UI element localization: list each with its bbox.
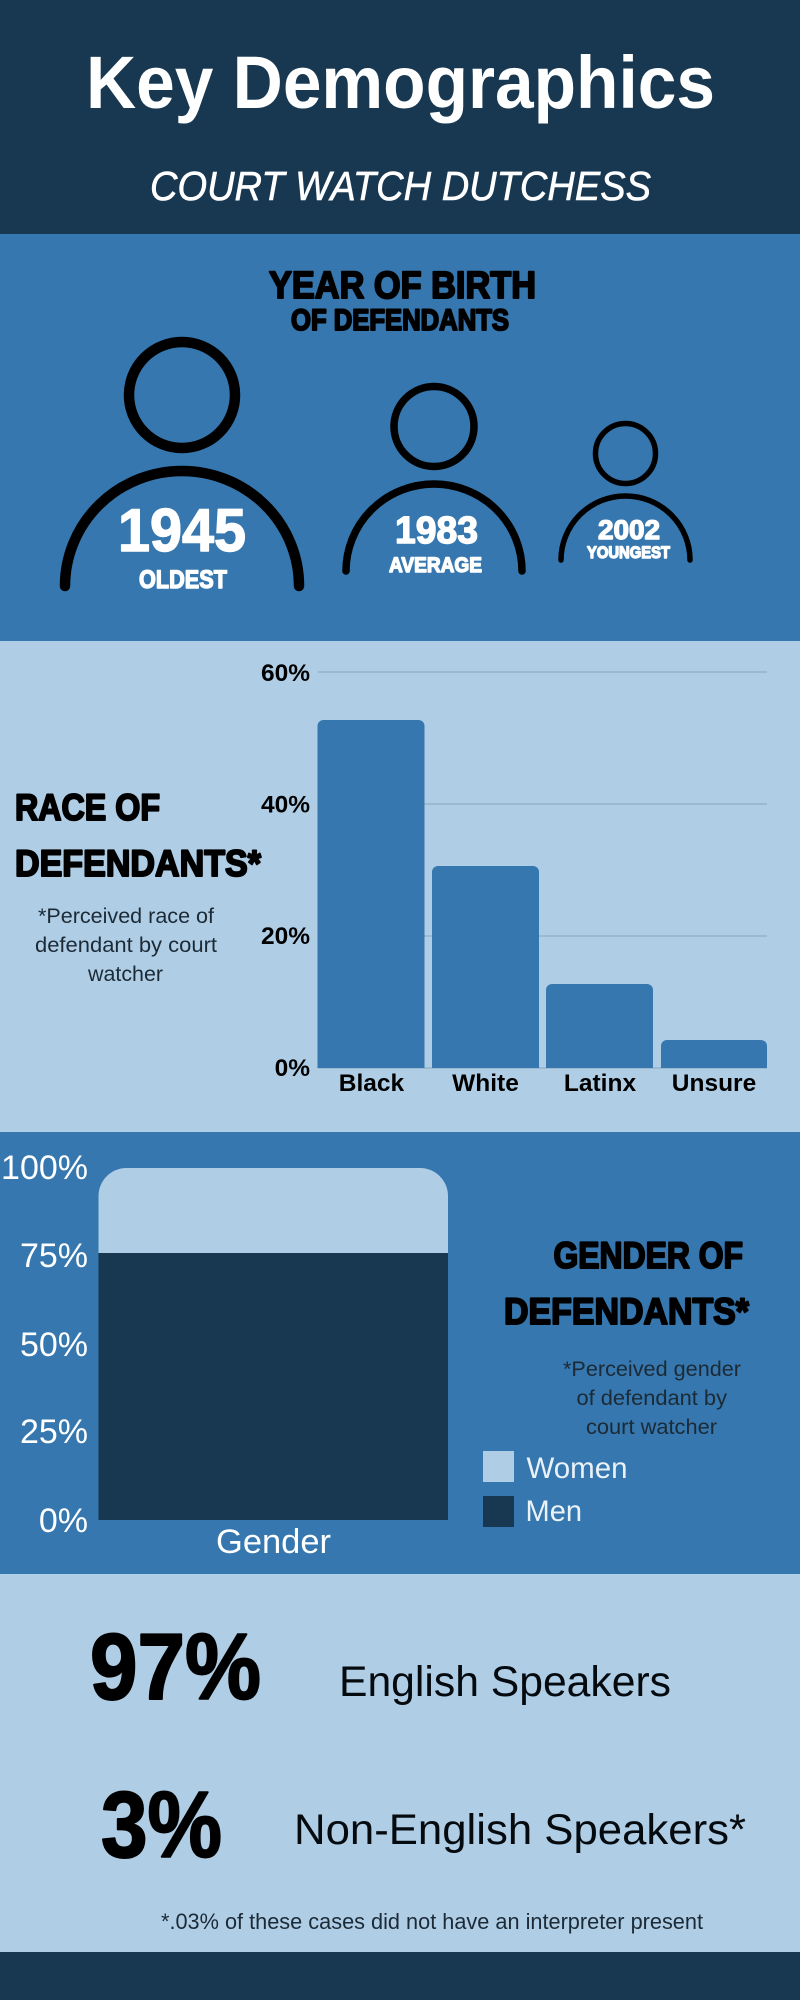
average label: AVERAGE [389,554,482,577]
category labels: Latinx [564,1070,636,1097]
average label [389,510,482,577]
category labels: Unsure [672,1070,756,1097]
y axis labels: 0% [39,1502,88,1540]
heading: race of defendants: DEFENDANTS* [15,843,262,884]
youngest label: 2002 [598,515,660,545]
label: non-english speakers: Non-English Speakers* [294,1806,746,1854]
y axis labels: 75% [20,1237,88,1275]
heading: year of birth: OF DEFENDANTS [291,304,509,337]
y axis labels [1,1149,88,1540]
y axis labels: 100% [1,1149,88,1187]
bar chart: race [261,660,767,1097]
note: perceived race: *Perceived race of [38,905,214,928]
panel: year of birth [0,234,800,641]
x axis label: Gender [216,1523,331,1561]
oldest label [118,497,246,594]
average label: 1983 [395,510,478,552]
stat: 3 percent: 3% [101,1772,222,1877]
y axis labels: 0% [275,1055,310,1082]
panel: header [0,0,800,234]
heading: gender of defendants: GENDER OF [554,1235,743,1276]
icon: average person [346,386,522,571]
category labels: White [452,1070,519,1097]
category labels: Black [339,1070,405,1097]
note: perceived race [35,905,217,986]
panel: language [0,1574,800,1952]
heading: gender of defendants: DEFENDANTS* [504,1291,750,1332]
y axis labels: 60% [261,660,310,687]
note: perceived gender: of defendant by [576,1387,728,1410]
icon: youngest person [561,424,690,560]
footer band [0,1952,800,2000]
note: perceived gender [563,1358,741,1439]
legend [483,1451,628,1528]
heading: race of defendants: RACE OF [15,787,160,828]
youngest label: YOUNGEST [587,543,671,562]
stacked bar chart: gender [1,1149,448,1561]
youngest label [587,515,671,562]
y axis labels: 50% [20,1326,88,1364]
stat: 97 percent: 97% [90,1614,261,1719]
footnote: *.03% of these cases did not have an interpreter present [161,1909,703,1934]
y axis labels: 20% [261,923,310,950]
title: Key Demographics [86,41,715,124]
icon: oldest person [65,342,299,586]
heading: year of birth [269,265,536,337]
subtitle: COURT WATCH DUTCHESS [150,163,651,209]
category labels [339,1070,756,1097]
bar segment: men [98,1253,448,1520]
y axis labels: 40% [261,792,310,818]
panel: race of defendants [0,641,800,1132]
y axis labels: 25% [20,1413,88,1451]
heading: gender of defendants [504,1235,750,1332]
panel: gender of defendants [0,1132,800,1575]
note: perceived gender: court watcher [586,1416,717,1439]
label: english speakers: English Speakers [339,1658,671,1706]
note: perceived race: defendant by court [35,934,217,957]
heading: race of defendants [15,787,262,884]
oldest label: OLDEST [139,566,227,594]
oldest label: 1945 [118,497,246,564]
note: perceived race: watcher [87,963,163,986]
heading: year of birth: YEAR OF BIRTH [269,265,536,307]
bars [318,720,767,1068]
note: perceived gender: *Perceived gender [563,1358,741,1381]
bar segment: women [98,1168,448,1253]
y axis labels [261,660,310,1082]
legend: Women [526,1452,628,1485]
legend: Men [526,1495,582,1528]
